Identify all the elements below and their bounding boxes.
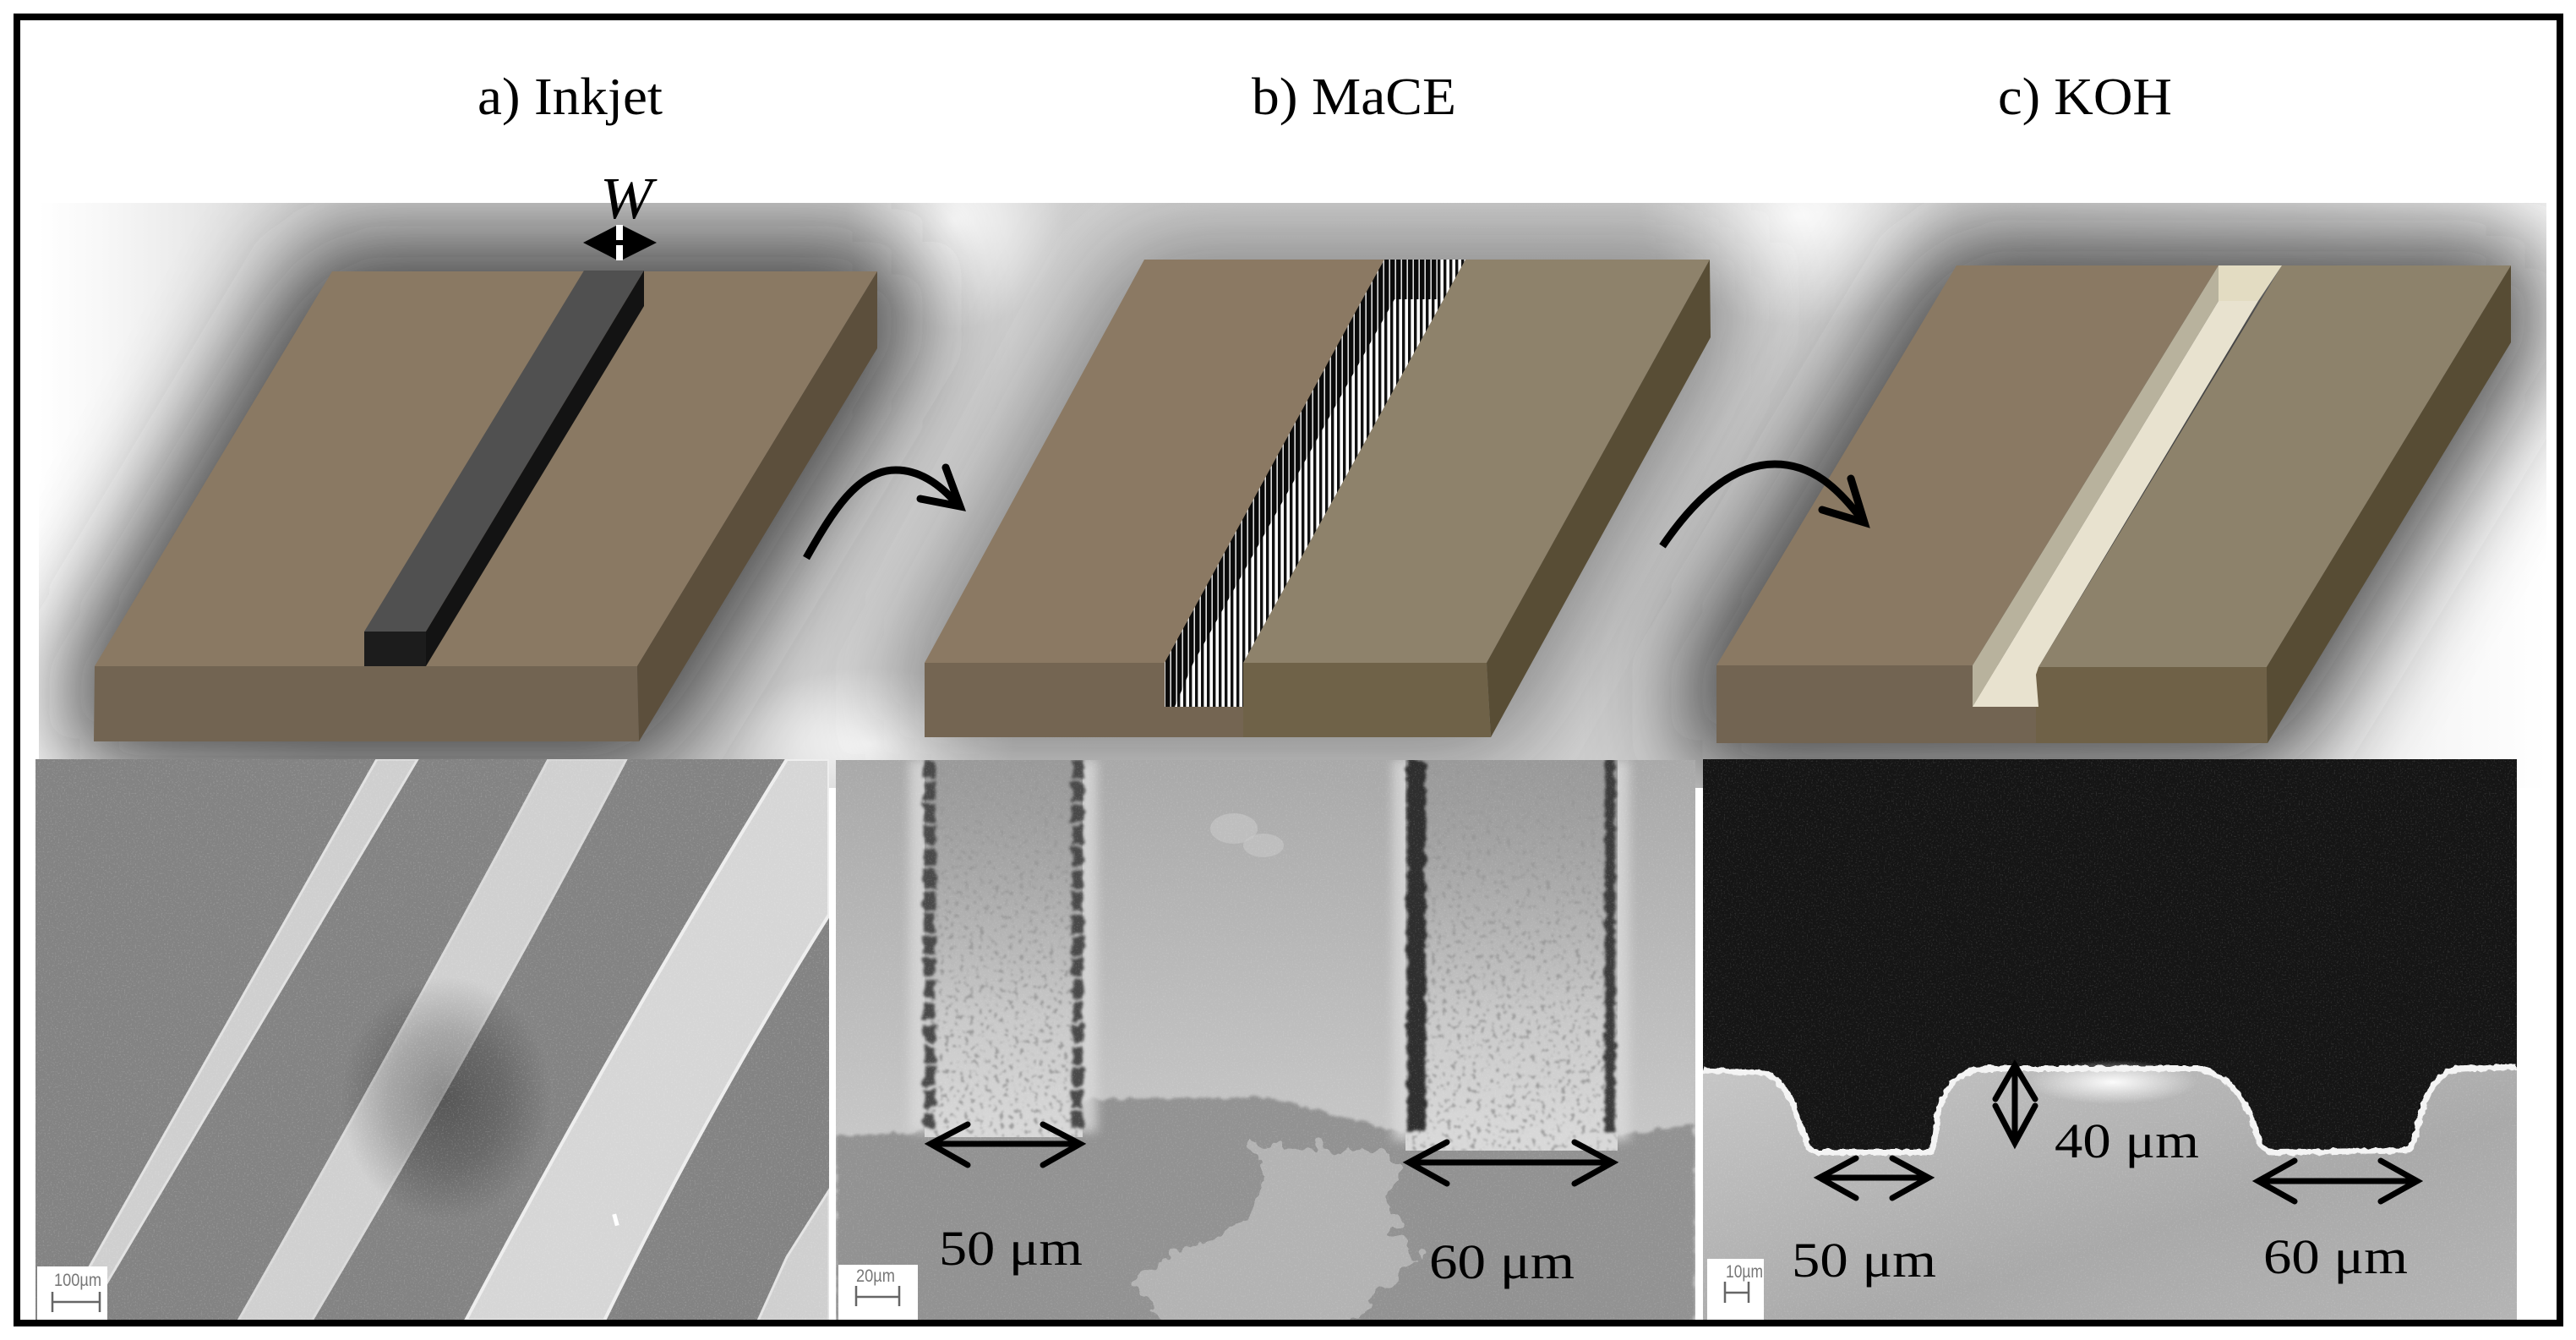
- arrow: 60 µm width, MaCE: [1409, 1142, 1613, 1184]
- panel: SEM cross-section after KOH: [1703, 759, 2517, 1321]
- panel: SEM image of inkjet lines: [35, 759, 829, 1321]
- title: b) MaCE: b) MaCE: [1252, 68, 1456, 126]
- charging blotch: [352, 987, 537, 1204]
- scale bar: 20 µm: [838, 1265, 918, 1321]
- panel: SEM image after MaCE: [836, 760, 1695, 1336]
- stripe 3: [466, 759, 829, 1321]
- bright edge: [1703, 1067, 2517, 1152]
- panel: schematic shadow backdrop: [39, 203, 2546, 788]
- scale bar: 10 µm: [1707, 1259, 1764, 1320]
- ink line: [364, 271, 644, 666]
- label: 60 µm, MaCE: 60 μm: [1429, 1234, 1575, 1289]
- stripe 2: [238, 759, 626, 1321]
- image grain: [35, 759, 829, 1321]
- arrow: Inkjet to MaCE: [806, 468, 960, 558]
- hatched etched channel: [1165, 260, 1465, 707]
- white debris spot: [612, 1213, 619, 1226]
- lower dark substrate region: [836, 1097, 1695, 1336]
- width label W: W: [600, 167, 658, 232]
- stripe 4: [758, 1190, 829, 1321]
- glow on ridge: [2028, 1060, 2197, 1104]
- label: 60 µm, KOH: 60 μm: [2263, 1229, 2408, 1284]
- diagram a: substrate with inkjet ink line: [94, 271, 877, 741]
- silicon profile: [1703, 1067, 2517, 1321]
- arrow: 50 µm width, KOH: [1820, 1158, 1929, 1198]
- label: 50 µm, KOH: 50 μm: [1792, 1233, 1936, 1288]
- stripe 1: [88, 759, 419, 1285]
- trench walls and floor: [1973, 265, 2282, 707]
- scale bar: 10 µm: 10µm: [1726, 1262, 1763, 1282]
- label: 40 µm, KOH: 40 μm: [2055, 1113, 2199, 1168]
- arrow: 60 µm width, KOH: [2258, 1161, 2417, 1201]
- arrow: width W double arrow: [583, 225, 657, 260]
- arrow: MaCE to KOH: [1662, 464, 1864, 546]
- title: a) Inkjet: a) Inkjet: [478, 68, 663, 126]
- label: 50 µm, MaCE: 50 μm: [939, 1221, 1083, 1276]
- etched trench 2: [1393, 760, 1629, 1151]
- scale bar: 100 µm: 100µm: [54, 1271, 101, 1290]
- scale bar: 100 µm: [37, 1266, 107, 1321]
- scale bar: 20 µm: 20µm: [856, 1266, 895, 1286]
- diagram c: substrate with KOH etched trench: [1716, 265, 2511, 743]
- light patch: [1134, 1140, 1424, 1336]
- diagram b: substrate with MaCE etched hatch: [925, 260, 1711, 737]
- image grain: [1703, 759, 2517, 1321]
- image grain: [836, 760, 1695, 1321]
- title: c) KOH: c) KOH: [1998, 68, 2172, 126]
- etched trench 1: [909, 760, 1097, 1137]
- arrow: 40 µm depth, KOH: [1995, 1065, 2035, 1143]
- arrow: 50 µm width, MaCE: [931, 1124, 1080, 1165]
